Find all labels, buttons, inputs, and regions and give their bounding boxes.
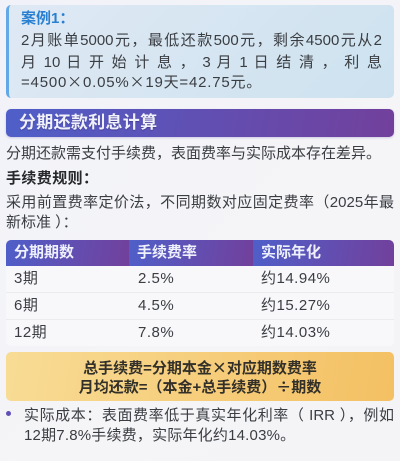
bullet dot xyxy=(6,411,11,416)
case text line 1: 2月账单5000元，最低还款500元，剩余4500元从2 xyxy=(21,32,382,49)
section heading bar xyxy=(6,109,394,137)
row: 3 installments xyxy=(6,266,394,293)
rules heading: 手续费规则： xyxy=(6,170,98,187)
row: 3 installments: 3期 xyxy=(14,270,38,287)
row: 6 installments: 约15.27% xyxy=(261,297,330,314)
table header: annualized: 实际年化 xyxy=(261,244,321,261)
case text line 3: =4500×0.05%×19天=42.75元。 xyxy=(21,71,262,92)
table header: installments xyxy=(6,240,129,266)
row: 12 installments xyxy=(14,324,330,341)
rules text xyxy=(6,194,394,231)
bullet line 1: 实际成本：表面费率低于真实年化利率（ IRR ），例如 xyxy=(24,407,394,424)
formula: monthly payment: 月均还款=（本金+总手续费）÷期数 xyxy=(79,376,321,397)
table header: fee rate xyxy=(129,240,253,266)
panel: case example xyxy=(6,5,394,98)
case heading: 案例1： xyxy=(21,10,74,27)
row: 3 installments: 2.5% xyxy=(138,270,174,287)
row: 12 installments: 7.8% xyxy=(138,324,174,341)
row: 12 installments: 12期 xyxy=(14,324,47,341)
intro text: 分期还款需支付手续费，表面费率与实际成本存在差异。 xyxy=(6,145,381,162)
table header: installments: 分期期数 xyxy=(14,244,74,261)
row: 6 installments: 4.5% xyxy=(138,297,174,314)
row: 12 installments: 约14.03% xyxy=(261,324,330,341)
formula box xyxy=(6,352,394,401)
fee table xyxy=(6,240,394,346)
row: 6 installments xyxy=(6,293,394,320)
formula: total fee: 总手续费=分期本金×对应期数费率 xyxy=(83,357,317,378)
rules text line 2: 新标准 ）： xyxy=(6,214,78,231)
table header: annualized xyxy=(253,240,394,266)
row: 3 installments: 约14.94% xyxy=(261,270,330,287)
row: 6 installments: 6期 xyxy=(14,297,38,314)
table header: fee rate: 手续费率 xyxy=(137,244,197,261)
section heading text: 分期还款利息计算 xyxy=(19,113,157,132)
bullet text xyxy=(24,407,394,444)
case text line 2: 月 10 日 开 始 计 息 ， 3 月 1 日 结 清 ， 利 息 xyxy=(21,54,382,71)
bullet line 2: 12期7.8%手续费，实际年化约14.03%。 xyxy=(24,427,295,444)
rules text line 1: 采用前置费率定价法，不同期数对应固定费率（2025年最 xyxy=(6,194,394,211)
